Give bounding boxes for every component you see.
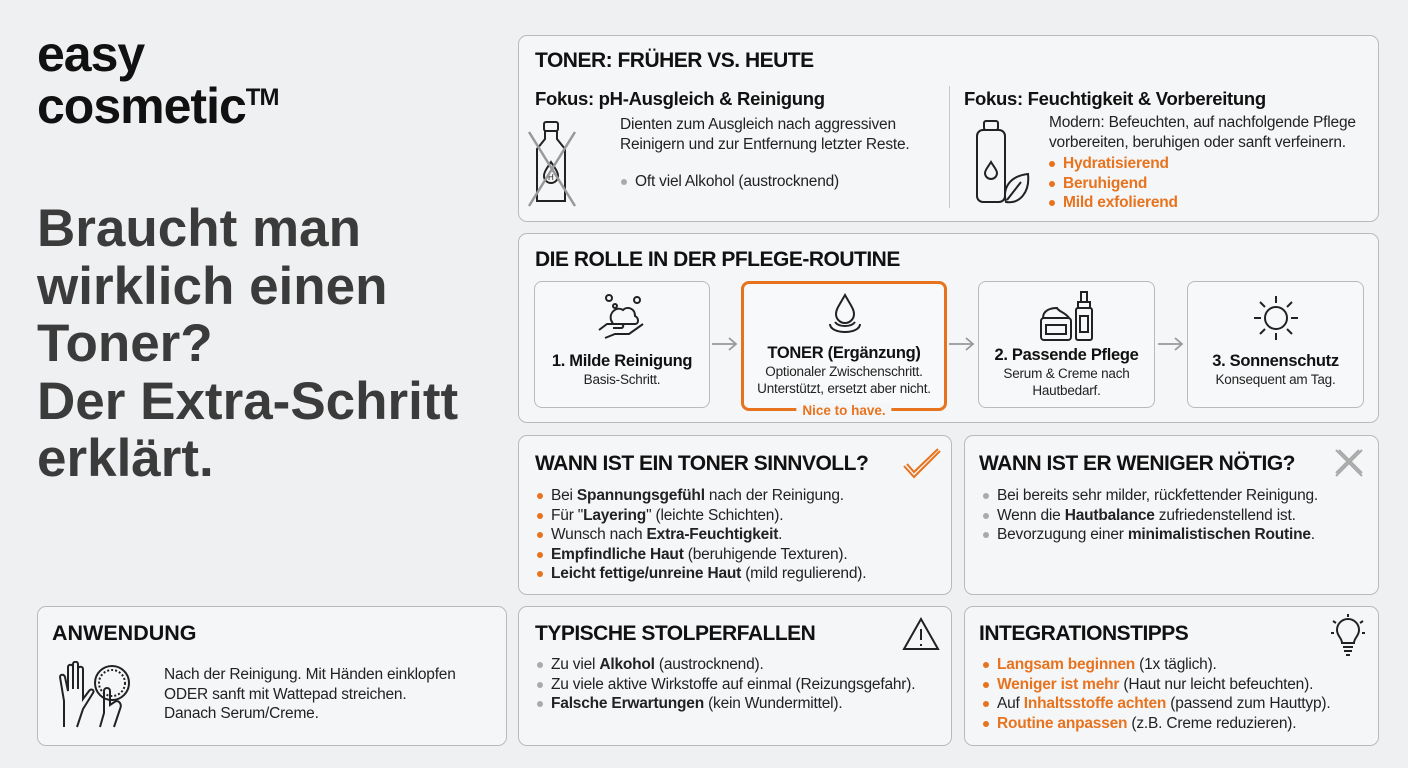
heading: INTEGRATIONSTIPPS — [979, 622, 1188, 645]
arrow 1 — [712, 338, 738, 350]
panel: wann sinnvoll — [518, 435, 952, 595]
arrow 3 — [1158, 338, 1184, 350]
heading: TONER: FRÜHER VS. HEUTE — [535, 49, 814, 72]
panel: anwendung — [37, 606, 507, 746]
icon: jar and serum — [1040, 291, 1093, 341]
main title — [36, 199, 458, 488]
text: früher: Reinigern und zur Entfernung letzter Reste. — [620, 136, 910, 152]
bullets: Zu viel Alkohol (austrocknend). — [551, 656, 764, 673]
bullets: Bevorzugung einer minimalistischen Routine. — [997, 526, 1315, 543]
logo: cosmeticTM — [37, 78, 278, 134]
main title: erklärt. — [37, 429, 214, 488]
bullets: Langsam beginnen (1x täglich). — [997, 656, 1217, 673]
panel: stolperfallen — [518, 606, 952, 746]
step toner (highlighted): TONER (Ergänzung) — [767, 344, 921, 362]
bullets: heute: Hydratisierend — [1063, 155, 1169, 172]
step toner (highlighted): Optionaler Zwischenschritt. — [765, 364, 923, 379]
subheading: früher: Fokus: pH-Ausgleich & Reinigung — [535, 88, 825, 109]
text: früher: Dienten zum Ausgleich nach aggressiven — [620, 116, 896, 133]
icon: drop — [829, 293, 861, 333]
bullets — [983, 487, 1318, 543]
bullets: Auf Inhaltsstoffe achten (passend zum Hauttyp). — [997, 695, 1330, 712]
icon: lightbulb — [1331, 614, 1365, 656]
icon: cross — [1335, 449, 1363, 477]
heading: WANN IST EIN TONER SINNVOLL? — [535, 452, 868, 475]
step toner (highlighted): Unterstützt, ersetzt aber nicht. — [757, 381, 931, 396]
bullets: heute — [1049, 155, 1178, 211]
bullets: Wenn die Hautbalance zufriedenstellend ist. — [997, 506, 1296, 524]
step 3: 3. Sonnenschutz — [1212, 352, 1339, 370]
main title: wirklich einen — [37, 256, 388, 316]
arrow 2 — [949, 338, 974, 350]
panel: toner früher vs heute — [518, 35, 1379, 222]
bullets: Leicht fettige/unreine Haut (mild regulierend). — [551, 565, 866, 582]
icon: check — [903, 448, 941, 478]
step 3 — [1187, 281, 1364, 408]
heading: TYPISCHE STOLPERFALLEN — [535, 622, 815, 645]
text: Nach der Reinigung. Mit Händen einklopfen — [164, 666, 456, 683]
step 2 — [978, 281, 1155, 408]
main title: Braucht man — [37, 199, 361, 258]
text: heute: vorbereiten, beruhigen oder sanft verfeinern. — [1049, 134, 1346, 150]
bullets: Zu viele aktive Wirkstoffe auf einmal (Reizungsgefahr). — [551, 676, 915, 692]
bullets: Bei Spannungsgefühl nach der Reinigung. — [551, 487, 844, 504]
step 1: Basis-Schritt. — [584, 372, 660, 387]
logo — [37, 26, 278, 134]
bullets: heute: Beruhigend — [1063, 174, 1147, 192]
heading: WANN IST ER WENIGER NÖTIG? — [979, 452, 1295, 475]
step 2: Serum & Creme nach — [1003, 366, 1130, 381]
icon: bottle with leaf — [976, 120, 1030, 204]
heading: ANWENDUNG — [52, 621, 197, 645]
text: früher — [620, 116, 910, 152]
panel: wann weniger nötig — [964, 435, 1379, 595]
main title: Der Extra-Schritt — [37, 372, 458, 430]
divider — [949, 86, 950, 208]
bullets — [983, 656, 1330, 732]
bullets: Routine anpassen (z.B. Creme reduzieren). — [997, 714, 1296, 732]
bullets: Für "Layering" (leichte Schichten). — [551, 506, 783, 524]
heading: DIE ROLLE IN DER PFLEGE-ROUTINE — [535, 248, 900, 271]
logo: easy — [37, 26, 144, 82]
main title: Toner? — [37, 314, 213, 373]
bullets — [537, 656, 915, 712]
bullet: alkohol: Oft viel Alkohol (austrocknend) — [635, 173, 839, 190]
icon: foam hand — [598, 294, 644, 339]
text: heute — [1049, 114, 1356, 150]
step 2: 2. Passende Pflege — [994, 346, 1139, 364]
panel: rolle in der pflege-routine — [518, 233, 1379, 423]
bullets: Bei bereits sehr milder, rückfettender Reinigung. — [997, 487, 1318, 504]
label: nice to have: Nice to have. — [802, 403, 886, 418]
bullets: heute: Mild exfolierend — [1063, 194, 1178, 211]
icon: crossed bottle: H — [548, 173, 554, 182]
bullets: Wunsch nach Extra-Feuchtigkeit. — [551, 526, 782, 543]
bullets: Weniger ist mehr (Haut nur leicht befeuchten). — [997, 676, 1313, 692]
icon: sun — [1254, 296, 1298, 340]
icon: warning — [902, 617, 940, 650]
icon: hands and pad — [59, 661, 130, 728]
text — [164, 666, 456, 722]
bullets: Falsche Erwartungen (kein Wundermittel). — [551, 695, 842, 712]
text: Danach Serum/Creme. — [164, 705, 319, 722]
bullets — [537, 487, 866, 582]
step 1 — [534, 281, 710, 408]
text: heute: Modern: Befeuchten, auf nachfolgende Pflege — [1049, 114, 1356, 131]
text: ODER sanft mit Wattepad streichen. — [164, 686, 406, 702]
step 1: 1. Milde Reinigung — [552, 352, 692, 370]
panel: integrationstipps — [964, 606, 1379, 746]
step 3: Konsequent am Tag. — [1216, 372, 1336, 387]
step 2: Hautbedarf. — [1032, 383, 1101, 398]
bullets: Empfindliche Haut (beruhigende Texturen). — [551, 546, 847, 562]
icon: crossed bottle — [528, 121, 576, 206]
subheading: heute: Fokus: Feuchtigkeit & Vorbereitung — [964, 88, 1266, 109]
step toner (highlighted) — [741, 281, 947, 411]
